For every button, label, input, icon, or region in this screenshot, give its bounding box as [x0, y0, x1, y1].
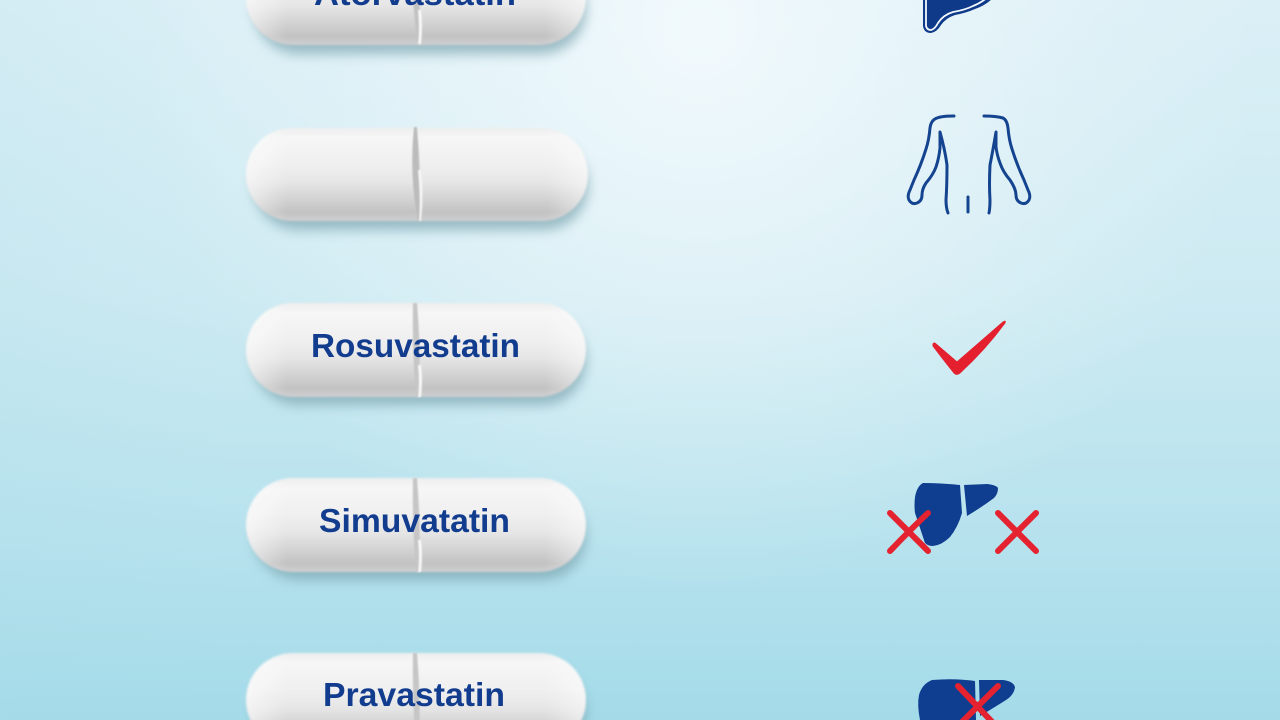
icon: liver with red cross: [918, 679, 1015, 720]
label: Pravastatin: Pravastatin: [323, 676, 505, 713]
label: Simuvatatin: Simuvatatin: [319, 502, 510, 539]
capsule: unlabelled: [246, 127, 588, 230]
icon: back and arms outline: [908, 116, 1030, 213]
capsule: Atorvastatin: [246, 0, 586, 54]
capsule: Simuvatatin: [246, 478, 586, 580]
capsule: Pravastatin: [246, 653, 586, 720]
capsule: Rosuvastatin: [246, 303, 586, 405]
cross: left: [890, 513, 928, 551]
icon: liver with two red crosses: [890, 483, 1036, 551]
label: Rosuvastatin: Rosuvastatin: [311, 327, 520, 364]
cross: centre: [958, 686, 998, 720]
icon: red check mark: [933, 321, 1005, 374]
cross: right: [998, 513, 1036, 551]
icon: outlined liver: [923, 0, 996, 33]
